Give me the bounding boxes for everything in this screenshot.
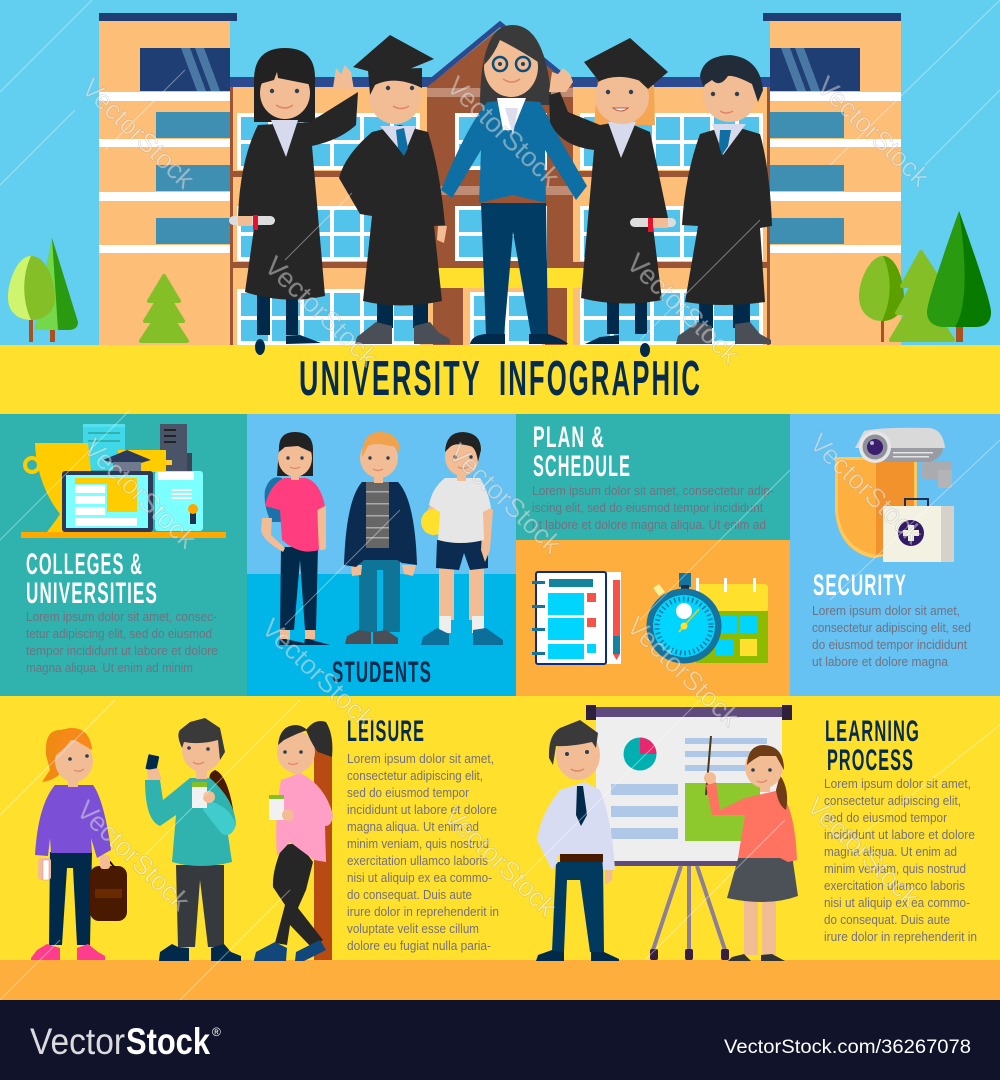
text block: plan description xyxy=(532,483,774,532)
footer image id: VectorStock.com/36267078 xyxy=(724,1037,971,1058)
watermarks: VectorStock xyxy=(621,248,746,370)
panel: title band xyxy=(0,345,1000,414)
heading: learning process: PROCESS xyxy=(827,744,914,777)
watermarks: VectorStock xyxy=(804,428,929,550)
panel: plan and schedule text xyxy=(516,414,790,540)
heading: colleges and universities: UNIVERSITIES xyxy=(26,577,158,610)
icon: college collage xyxy=(21,424,226,538)
panel: sky background xyxy=(0,0,1000,345)
watermarks: VectorStock xyxy=(621,611,746,733)
text block: learning description: Lorem ipsum dolor sit amet, xyxy=(824,776,971,791)
text block: learning description: sed do eiusmod tempor xyxy=(824,810,948,825)
watermarks: VectorStock xyxy=(76,73,201,195)
icon: shield, camera and first aid kit xyxy=(835,428,954,562)
text block: leisure description xyxy=(347,751,499,953)
text block: colleges description: Lorem ipsum dolor sit amet, consec- xyxy=(26,609,217,624)
heading: learning process: LEARNING xyxy=(825,715,920,748)
icon: stopwatch xyxy=(646,573,722,664)
text block: learning description: nisi ut aliquip ex ea commo- xyxy=(824,895,970,910)
illustration: leisure boy with phone xyxy=(145,718,241,961)
watermarks: VectorStock xyxy=(438,801,563,923)
text block: security description xyxy=(812,603,971,669)
icon: trees left xyxy=(8,238,187,342)
illustration: graduate boy with dark hair xyxy=(676,55,772,344)
icon: notebook xyxy=(532,572,621,664)
watermarks xyxy=(71,71,936,923)
panel: students xyxy=(247,414,516,696)
text block: learning description: exercitation ullamco laboris xyxy=(824,878,965,893)
text block: colleges description: magna aliqua. Ut enim ad minim xyxy=(26,660,193,675)
text block: plan description: iscing elit, sed do eiusmod tempor incididunt xyxy=(532,500,763,515)
text block: leisure description: dolore eu fugiat nulla paria- xyxy=(347,938,491,953)
text block: learning description: incididunt ut labore et dolore xyxy=(824,827,975,842)
text block: learning description: minim veniam, quis nostrud xyxy=(824,861,966,876)
heading: plan and schedule: SCHEDULE xyxy=(533,450,631,483)
text block: learning description: irure dolor in reprehenderit in xyxy=(824,929,977,944)
icon: trees right xyxy=(859,211,991,342)
text block: security description: consectetur adipiscing elit, sed xyxy=(812,620,971,635)
illustration: leisure girl in purple xyxy=(31,728,127,960)
illustration: graduate girl waving xyxy=(229,48,358,355)
watermarks: VectorStock xyxy=(256,613,381,735)
text block: colleges description xyxy=(26,609,218,675)
heading: colleges and universities xyxy=(26,548,158,610)
text block: colleges description: tempor incididunt ut labore et dolore xyxy=(26,643,218,658)
icon: tripod xyxy=(650,866,729,960)
footer logo: Vector xyxy=(30,1021,125,1062)
text block: learning description xyxy=(824,776,977,944)
heading: learning process xyxy=(825,715,920,777)
text block: security description: do eiusmod tempor incididunt xyxy=(812,637,967,652)
watermarks: VectorStock xyxy=(259,251,384,373)
text block: leisure description: consectetur adipiscing elit, xyxy=(347,768,483,783)
illustration: student boy with ball xyxy=(421,432,503,645)
text block: leisure description: voluptate velit esse cillum xyxy=(347,921,479,936)
watermarks: VectorStock xyxy=(78,433,203,555)
illustration: student boy with jacket xyxy=(344,432,417,644)
panel: plan and schedule icons xyxy=(516,540,790,696)
text block: learning description: magna aliqua. Ut enim ad xyxy=(824,844,957,859)
heading: colleges and universities: COLLEGES & xyxy=(26,548,143,581)
illustration: leisure girl leaning on post xyxy=(254,721,333,961)
illustration: presentation board xyxy=(586,705,792,960)
text block: leisure description: minim veniam, quis nostrud xyxy=(347,836,489,851)
text block: learning description: consectetur adipiscing elit, xyxy=(824,793,961,808)
footer logo: Stock xyxy=(126,1021,210,1062)
illustration: girl with pointer xyxy=(704,736,798,961)
panel: security xyxy=(790,414,1000,696)
panel: university building xyxy=(230,24,770,345)
text block: leisure description: magna aliqua. Ut enim ad xyxy=(347,819,479,834)
illustration: graduate girl with diploma xyxy=(549,38,676,357)
text block: security description: Lorem ipsum dolor sit amet, xyxy=(812,603,960,618)
heading: plan and schedule xyxy=(533,421,631,483)
title: UNIVERSITY xyxy=(299,352,482,406)
watermarks: VectorStock xyxy=(811,71,936,193)
text block: plan description: ut labore et dolore magna aliqua. Ut enim ad xyxy=(532,517,766,532)
panel: colleges and universities xyxy=(0,414,247,696)
illustration: teacher with glasses xyxy=(441,25,587,344)
text block: colleges description: tetur adipiscing elit, sed do eiusmod xyxy=(26,626,212,641)
illustration: man in shirt and tie xyxy=(536,720,619,961)
footer logo xyxy=(30,1021,221,1062)
illustration: student girl xyxy=(261,432,330,645)
illustration: graduate boy with cap xyxy=(339,35,450,344)
footer logo: ® xyxy=(212,1025,221,1039)
text block: leisure description: irure dolor in reprehenderit in xyxy=(347,904,499,919)
text block: learning description: do consequat. Duis aute xyxy=(824,912,950,927)
heading: security: SECURITY xyxy=(813,569,907,602)
text block: leisure description: nisi ut aliquip ex ea commo- xyxy=(347,870,492,885)
text block: leisure description: exercitation ullamco laboris xyxy=(347,853,488,868)
text block: leisure description: do consequat. Duis aute xyxy=(347,887,472,902)
text block: plan description: Lorem ipsum dolor sit amet, consectetur adip- xyxy=(532,483,774,498)
heading: plan and schedule: PLAN & xyxy=(533,421,605,454)
text block: leisure description: sed do eiusmod tempor xyxy=(347,785,470,800)
heading: students: STUDENTS xyxy=(332,656,432,689)
watermarks: VectorStock xyxy=(441,71,566,193)
panel: right tower xyxy=(763,13,901,345)
watermarks: VectorStock xyxy=(443,438,568,560)
watermarks: VectorStock xyxy=(801,791,926,913)
title: INFOGRAPHIC xyxy=(499,352,702,406)
text block: leisure description: Lorem ipsum dolor sit amet, xyxy=(347,751,494,766)
panel: left tower xyxy=(99,13,237,345)
heading: leisure: LEISURE xyxy=(347,715,425,748)
panel: leisure and learning background xyxy=(0,696,1000,1000)
text block: security description: ut labore et dolore magna xyxy=(812,654,949,669)
icon: calendar xyxy=(696,578,768,663)
watermarks: VectorStock xyxy=(71,795,196,917)
footer bar xyxy=(0,1000,1000,1080)
text block: leisure description: incididunt ut labore et dolore xyxy=(347,802,497,817)
